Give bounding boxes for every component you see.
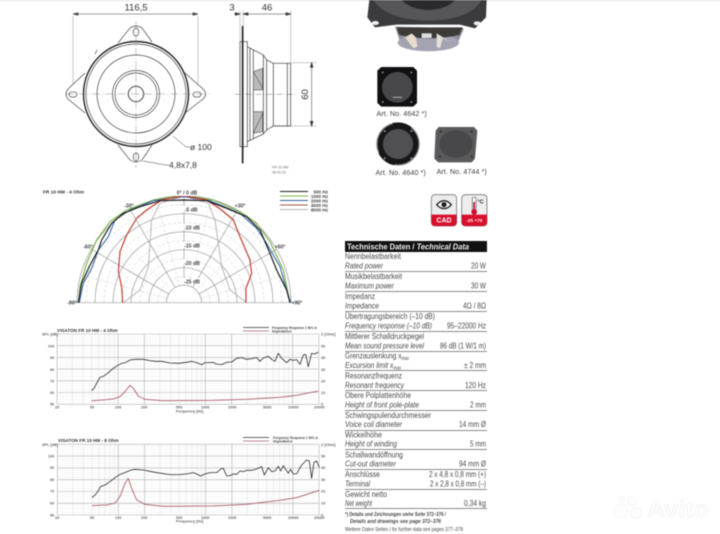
row: maximum power: Musikbelastbarkeit: [345, 271, 403, 281]
chart axis labels: 20000: [314, 516, 325, 520]
polar labels: -10 dB: [184, 226, 200, 232]
row: cut-out diameter: 94 mm Ø: [459, 458, 486, 468]
chart curves: [92, 460, 319, 506]
row: terminals: 2 x 2,8 x 0,8 mm (–): [430, 478, 486, 488]
chart axis labels: 0: [321, 402, 323, 406]
row: excursion limit: [345, 350, 486, 372]
icon: temperature range: [462, 195, 487, 226]
polar legend: 4000 Hz: [311, 203, 329, 208]
watermark: Avito: [614, 496, 709, 522]
polar curves: [78, 195, 291, 303]
label: art no 4642: Art. No. 4642 *): [376, 109, 427, 118]
row: maximum power: Maximum power: [345, 280, 395, 290]
row: voice coil: 14 mm Ø: [459, 419, 486, 429]
chart axis labels: 20000: [314, 406, 325, 410]
chart axis labels: 40: [321, 466, 325, 470]
icon: temperature range: -25 +70: [466, 218, 483, 223]
polar grid: [70, 196, 298, 303]
row: height of winding: 5 mm: [470, 438, 486, 448]
chart legend: [243, 436, 319, 444]
row: excursion limit: ± 2 mm: [464, 360, 486, 370]
label: depth dimension: 46: [262, 2, 272, 14]
chart axis labels: 5000: [263, 516, 271, 520]
row: frequency response: 95–22000 Hz: [447, 320, 486, 330]
polar labels: +30°: [235, 204, 245, 210]
row: front pole plate: 2 mm: [470, 400, 486, 410]
chart axis labels: 40: [321, 356, 325, 360]
chart axis labels: 50: [90, 406, 94, 410]
polar labels: -20 dB: [184, 261, 200, 267]
polar labels: -60°: [83, 244, 93, 250]
row: net weight: Net weight: [345, 498, 372, 508]
row: voice coil: Schwingspulendurchmesser: [345, 410, 431, 420]
chart axis labels: 80: [50, 478, 54, 482]
row: front pole plate: Obere Polplattenhöhe: [345, 390, 411, 400]
label: flange offset dimension: 3: [229, 2, 235, 14]
row: terminals: Terminal: [345, 478, 371, 488]
chart axis labels: 90: [50, 466, 54, 470]
row: net weight: 0,34 kg: [464, 498, 486, 508]
footnote: Weitere Daten Seiten / for further data see pages 377–378: [345, 527, 463, 533]
row: net weight: Gewicht netto: [345, 489, 387, 499]
chart title: VISATON FR 10 HM - 4 Ohm: [57, 328, 118, 333]
row: impedance: Impedance: [345, 300, 379, 310]
row: voice coil: [345, 410, 486, 429]
panel: technical data table: [345, 241, 487, 533]
chart axis labels: 10000: [288, 516, 299, 520]
polar legend: 500 Hz: [313, 190, 329, 194]
row: resonant frequency: Resonant frequency: [345, 380, 405, 390]
chart legend: Frequency Response 1 W/1 m: [273, 436, 319, 440]
chart axis labels: 50: [321, 344, 325, 348]
chart axis labels: 2000: [228, 516, 236, 520]
chart axis labels: SPL [dB]: [42, 332, 59, 336]
row: sound pressure level: Mittlerer Schalldruckpegel: [345, 331, 424, 341]
row: rated power: Rated power: [345, 260, 384, 270]
chart legend: [243, 326, 318, 334]
polar labels: -15 dB: [184, 244, 200, 250]
chart axis labels: 20: [321, 490, 325, 494]
panel: side view technical drawing: [234, 11, 317, 163]
footnote: [345, 512, 463, 533]
chart: frequency response 4 ohm: [42, 326, 336, 414]
polar labels: -25 dB: [184, 280, 200, 286]
row: cut-out diameter: Cut-out diameter: [345, 458, 397, 468]
chart axis labels: Z [Ohm]: [321, 443, 336, 447]
chart axis labels: 100: [115, 406, 121, 410]
label: width dimension: 116,5: [124, 2, 148, 14]
chart axis labels: 5000: [263, 406, 271, 410]
chart axis labels: 2000: [228, 406, 236, 410]
row: frequency response: Übertragungsbereich (–10 dB): [345, 311, 435, 321]
chart axis labels: 80: [50, 368, 54, 372]
chart axis labels: 200: [141, 406, 147, 410]
chart axis labels: 60: [50, 502, 54, 506]
chart axis labels: SPL [dB]: [42, 443, 59, 447]
chart axis labels: 70: [50, 490, 54, 494]
chart axis labels: [42, 443, 336, 524]
row: rated power: [345, 251, 486, 270]
polar labels: 0° / 0 dB: [177, 190, 198, 196]
row: front pole plate: [345, 390, 486, 410]
row: excursion limit: max: [402, 356, 409, 362]
chart legend: Impedance: [273, 440, 293, 444]
polar legend: 2000 Hz: [311, 198, 329, 204]
polar labels: +90°: [292, 300, 302, 306]
polar legend: 1000 Hz: [311, 194, 329, 199]
row: resonant frequency: 120 Hz: [465, 380, 486, 390]
icon: CAD: CAD: [436, 218, 452, 225]
chart legend: Frequency Response 1 W/1 m: [272, 326, 318, 330]
row: height of winding: Wickelhöhe: [345, 430, 382, 440]
watermark: Avito: Avito: [647, 496, 709, 522]
accessory: grille 4744: [434, 127, 477, 162]
chart axis labels: 200: [141, 516, 147, 520]
row: terminals: Anschlüsse: [345, 469, 380, 479]
polar labels: -90°: [67, 300, 77, 306]
footnote: *) Details und Zeichnungen siehe Seite 372–376 /: [345, 512, 447, 518]
row: front pole plate: Height of front pole-plate: [345, 400, 419, 410]
row: cut-out diameter: [345, 450, 486, 468]
row: sound pressure level: 86 dB (1 W/1 m): [440, 340, 486, 350]
row: maximum power: 30 W: [471, 280, 486, 290]
chart axis labels: 90: [50, 356, 54, 360]
row: rated power: Nennbelastbarkeit: [345, 251, 402, 261]
chart grid: [57, 444, 319, 515]
chart axis labels: 20: [55, 516, 59, 520]
icon: CAD: [431, 195, 457, 226]
row: terminals: [345, 469, 486, 488]
chart axis labels: Frequency [Hz]: [176, 520, 204, 524]
chart axis labels: 50: [321, 454, 325, 458]
row: excursion limit: Excursion limit x: [345, 360, 405, 370]
label: drawing number: 08.01.02: [272, 170, 286, 174]
polar labels: -5 dB: [185, 208, 198, 214]
chart axis labels: 30: [321, 368, 325, 372]
label: art no 4640: Art. No. 4640 *): [376, 168, 426, 177]
polar title: FR 10 HM - 4 Ohm: [43, 190, 84, 196]
chart axis labels: 50: [50, 514, 54, 518]
chart axis labels: [42, 332, 336, 414]
photo: speaker rear: [367, 0, 487, 51]
row: rated power: 20 W: [471, 260, 486, 270]
chart axis labels: Z [Ohm]: [321, 332, 336, 336]
accessory: grille 4640: [376, 122, 420, 166]
table header: Technische Daten / Technical Data: [347, 242, 469, 252]
row: cut-out diameter: Schallwandöffnung: [345, 450, 403, 460]
row: impedance: 4Ω / 8Ω: [463, 300, 486, 310]
row: maximum power: [345, 271, 486, 290]
row: voice coil: Voice coil diameter: [345, 419, 403, 429]
chart axis labels: 1000: [201, 516, 209, 520]
row: resonant frequency: [345, 370, 486, 390]
polar legend: 8000 Hz: [311, 208, 329, 212]
chart axis labels: 10: [321, 391, 325, 395]
chart axis labels: 1000: [201, 406, 209, 410]
chart axis labels: 100: [48, 344, 54, 348]
row: impedance: Impedanz: [345, 291, 375, 301]
row: terminals: 2 x 4,8 x 0,8 mm (+): [429, 469, 486, 479]
row: frequency response: [345, 311, 486, 330]
chart axis labels: Frequency [Hz]: [176, 410, 204, 414]
row: excursion limit: Grenzauslenkung x: [345, 350, 416, 360]
chart axis labels: 10: [321, 502, 325, 506]
row: sound pressure level: [345, 331, 486, 350]
chart grid: [57, 334, 319, 404]
row: height of winding: [345, 430, 486, 448]
row: sound pressure level: Mean sound pressure level: [345, 340, 425, 350]
label: art no 4744: Art. No. 4744 *): [436, 167, 487, 176]
accessory: grille 4642: [377, 67, 417, 107]
chart axis labels: 500: [176, 406, 182, 410]
panel: front view technical drawing: [66, 13, 210, 168]
row: net weight: [345, 489, 486, 508]
label: drawing number: FR 10 HM: [272, 166, 288, 170]
chart axis labels: 60: [50, 391, 54, 395]
label: mounting hole size: 4,8x7,8: [169, 160, 197, 170]
chart title: VISATON FR 10 HM - 8 Ohm: [58, 438, 119, 443]
row: excursion limit: max: [393, 366, 401, 372]
icon: temperature range: °C: [477, 199, 484, 205]
chart axis labels: 0: [321, 514, 323, 518]
label: diameter: ø 100: [190, 142, 212, 152]
row: resonant frequency: Resonanzfrequenz: [345, 370, 402, 380]
chart axis labels: 20: [321, 380, 325, 384]
row: frequency response: Frequency response (–10 dB): [345, 320, 432, 330]
chart axis labels: 500: [176, 516, 182, 520]
chart curves: [92, 352, 318, 401]
table separators: [345, 272, 487, 508]
label: magnet dimension: 60: [300, 89, 311, 100]
polar diagram: [43, 190, 329, 306]
chart axis labels: 10000: [288, 406, 299, 410]
chart axis labels: 50: [50, 402, 54, 406]
chart axis labels: 20: [55, 406, 59, 410]
polar legend: [280, 190, 329, 212]
chart axis labels: 30: [321, 478, 325, 482]
polar labels: -30°: [124, 204, 134, 210]
chart axis labels: 100: [115, 516, 121, 520]
chart axis labels: 50: [90, 516, 94, 520]
chart axis labels: 100: [48, 454, 54, 458]
chart: frequency response 8 ohm: [42, 436, 336, 524]
row: height of winding: Height of winding: [345, 438, 397, 448]
polar labels: +60°: [275, 244, 285, 250]
chart legend: Impedance: [272, 330, 292, 334]
row: impedance: [345, 291, 486, 310]
polar labels: [67, 190, 302, 306]
footnote: Details and drawings see page 372–376: [350, 519, 441, 525]
chart axis labels: 70: [50, 380, 54, 384]
